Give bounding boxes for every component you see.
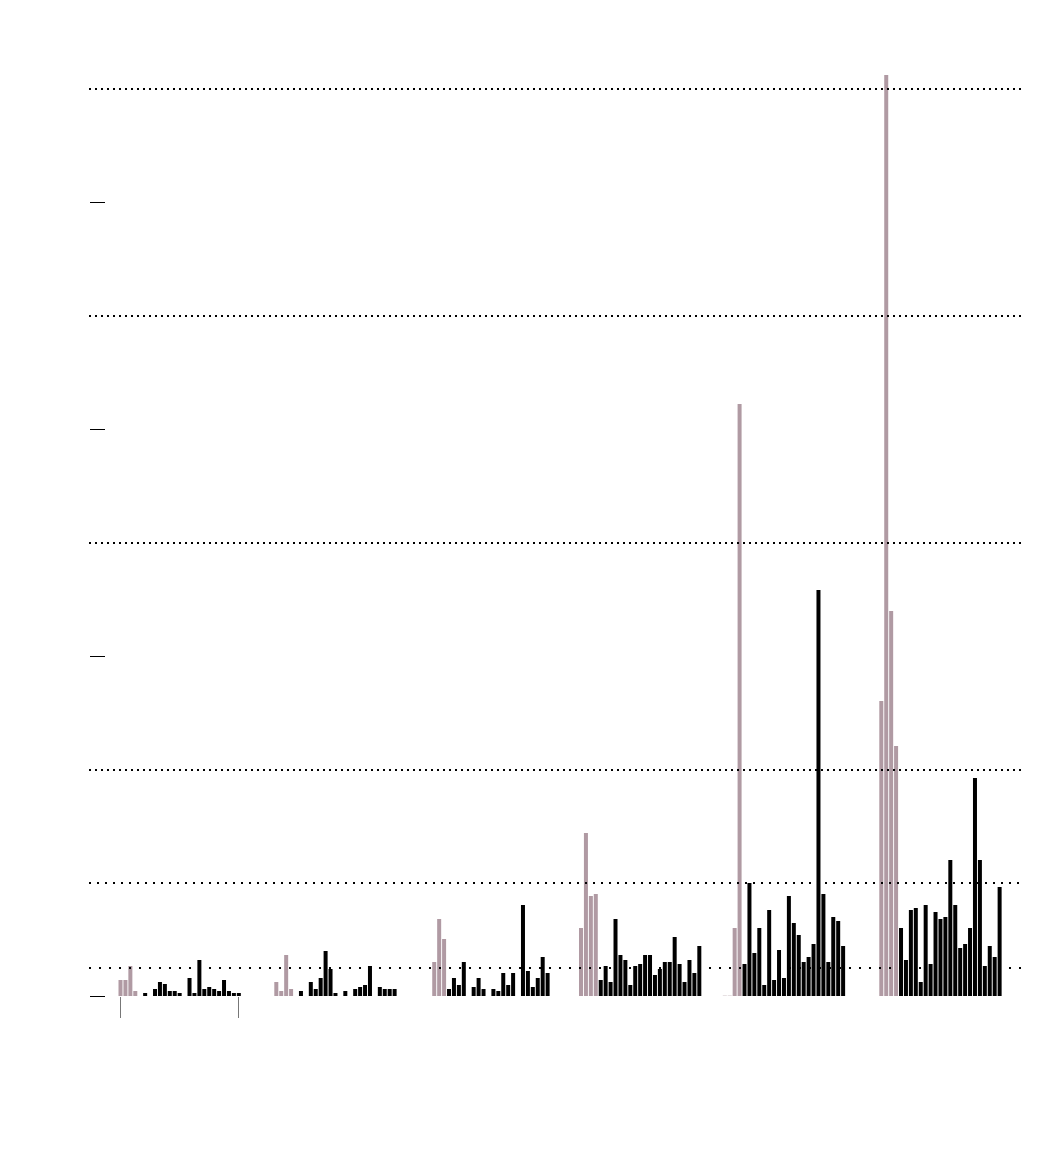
bar group 4 — [579, 833, 701, 996]
bar group 1 — [118, 960, 241, 996]
bar group 6 — [879, 75, 1002, 996]
x axis bracket ticks — [120, 997, 239, 1018]
bar group 5 — [723, 404, 845, 996]
bar group 3 — [432, 905, 550, 996]
bar group 2 — [274, 951, 397, 996]
y axis ticks — [90, 202, 105, 997]
